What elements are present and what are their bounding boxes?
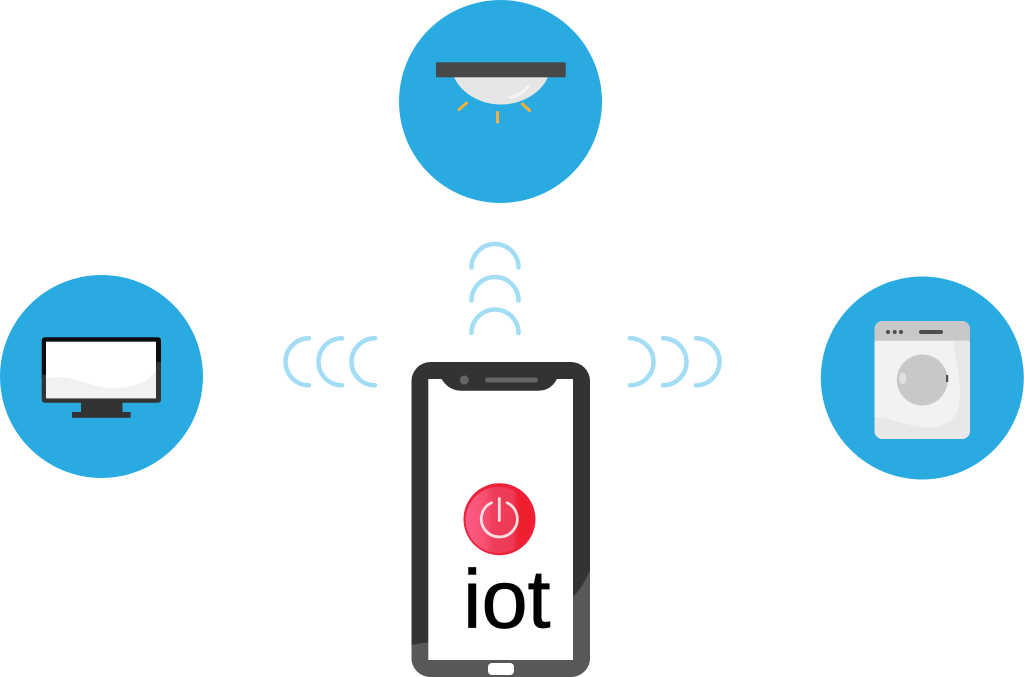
phone home button bbox=[488, 663, 514, 675]
phone screen bbox=[428, 379, 573, 660]
smartphone bbox=[411, 362, 591, 677]
icon: light mount bar bbox=[436, 62, 566, 77]
icon: washer buttons bbox=[886, 330, 943, 334]
power icon bbox=[481, 498, 517, 537]
signal arcs: top bbox=[472, 244, 518, 333]
panel: washing machine bbox=[821, 276, 1024, 480]
panel: television bbox=[0, 275, 203, 478]
icon: TV stand bbox=[72, 402, 131, 418]
icon: washer shading bbox=[874, 340, 971, 440]
icon: washer drum bbox=[897, 354, 948, 406]
icon: door handle bbox=[946, 375, 948, 382]
phone body highlight bbox=[411, 568, 591, 677]
icon: TV screen bbox=[46, 342, 156, 398]
icon: TV frame bbox=[42, 337, 161, 379]
icon: TV screen reflection bbox=[46, 371, 156, 398]
icon: washer body bbox=[874, 321, 970, 439]
signal arcs: right bbox=[630, 338, 719, 385]
signal arcs: left bbox=[285, 338, 375, 385]
icon: drum highlight bbox=[899, 372, 906, 384]
phone speaker bbox=[485, 378, 538, 382]
power button bbox=[464, 483, 536, 555]
icon: light dome bbox=[454, 77, 548, 104]
icon: light rays bbox=[459, 103, 530, 122]
panel: smart light bbox=[399, 0, 602, 203]
phone body bbox=[412, 362, 590, 677]
label: iot: iot bbox=[463, 553, 551, 646]
icon: washer control panel bbox=[874, 320, 971, 341]
phone camera bbox=[460, 376, 469, 384]
icon: light highlight bbox=[510, 86, 528, 98]
